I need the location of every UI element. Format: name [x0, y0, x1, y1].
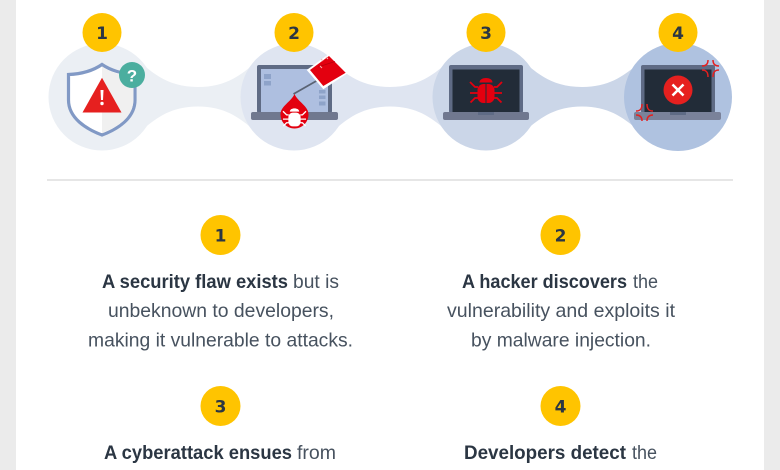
step 2 description: 2 [555, 226, 566, 246]
step 1 description: A security flaw exists [102, 271, 288, 293]
step 3 description: 3 [215, 398, 226, 418]
step 2 description: vulnerability and exploits it [447, 300, 676, 322]
step badge 2: 2 [288, 24, 300, 44]
step 2 description [447, 215, 676, 352]
step 1 description: unbeknown to developers, [108, 300, 334, 322]
step 3 description [104, 386, 336, 464]
flow ribbon [48, 43, 732, 151]
icon: crashed laptop [634, 60, 721, 121]
step 1 description [88, 215, 353, 352]
step 3 description: A cyberattack ensues [104, 442, 292, 464]
step 2 description: by malware injection. [471, 330, 651, 352]
icon: infected laptop [443, 65, 529, 120]
step badge 2 [274, 13, 314, 52]
step badge 1: 1 [96, 24, 108, 44]
step 4 description [464, 386, 657, 464]
step badge 1 [82, 13, 122, 52]
step badge 3: 3 [480, 24, 492, 44]
step 1 description: making it vulnerable to attacks. [88, 330, 353, 352]
icon: shield warning [68, 62, 145, 135]
icon: shield warning: ? [127, 66, 137, 86]
step 4 description: 4 [555, 398, 567, 418]
step 2 description: the [633, 271, 658, 293]
step badge 3 [466, 13, 506, 52]
icon: laptop with malware injection [251, 53, 348, 128]
step 1 description: 1 [215, 226, 226, 246]
step 1 description: but is [293, 271, 339, 293]
step 4 description: the [632, 442, 657, 464]
step badge 4 [658, 13, 698, 52]
step badge 4: 4 [672, 24, 684, 44]
step 4 description: Developers detect [464, 442, 626, 464]
step 2 description: A hacker discovers [462, 271, 627, 293]
step 3 description: from [297, 442, 336, 464]
